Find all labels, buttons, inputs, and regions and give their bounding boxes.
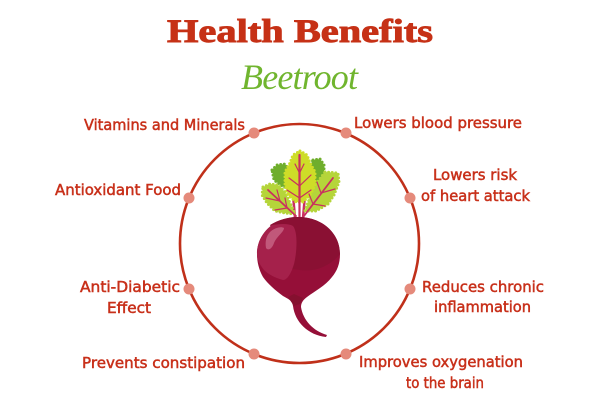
label: lowers risk of heart attack [421,166,530,205]
label: prevents constipation: Prevents constipation [82,354,245,372]
title: Health Benefits [167,14,433,50]
dark shaded upper part [270,217,340,270]
label: improves oxygenation to the brain [359,353,523,392]
stems [293,195,305,218]
label: anti-diabetic effect: Anti-Diabetic [80,278,180,296]
label: improves oxygenation to the brain: Improves oxygenation [359,353,523,371]
label: antioxidant food: Antioxidant Food [55,181,181,199]
center leaf [285,151,315,202]
back leaves [272,159,324,190]
highlight [257,224,296,280]
label: anti-diabetic effect [80,278,180,317]
ring with nodes [180,124,419,363]
veins [266,155,335,217]
glare [266,227,284,249]
subtitle: Beetroot [241,57,359,97]
label: anti-diabetic effect: Effect [107,299,151,317]
label: reduces chronic inflammation: inflammation [434,298,531,316]
label: vitamins and minerals: Vitamins and Minerals [84,116,245,134]
label: lowers blood pressure: Lowers blood pressure [354,114,522,132]
root body [257,217,340,337]
label: lowers risk of heart attack: of heart attack [421,187,530,205]
label: reduces chronic inflammation [422,278,544,316]
label: lowers risk of heart attack: Lowers risk [433,166,517,184]
label: improves oxygenation to the brain: to the brain [406,374,484,392]
right leaf [305,172,339,211]
neck shadow [288,294,303,306]
icon: beetroot [257,151,340,337]
left leaf [262,184,295,214]
label: reduces chronic inflammation: Reduces chronic [422,278,544,296]
